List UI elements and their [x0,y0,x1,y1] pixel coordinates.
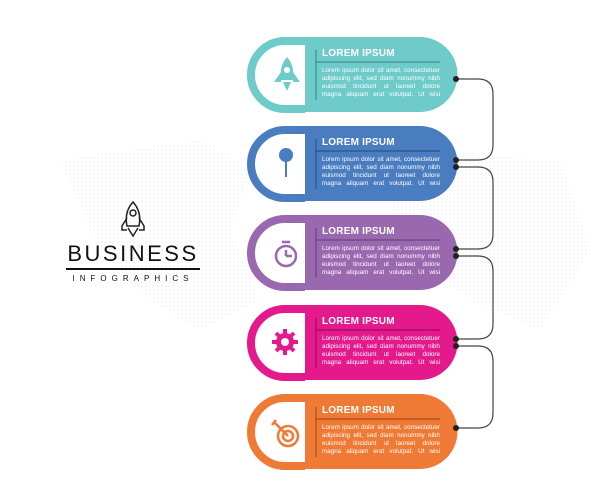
text: euismod tincidunt ut laoreet dolore [322,172,440,179]
text block 1 [322,48,440,98]
text: Lorem ipsum dolor sit amet, consectetuer [322,424,440,431]
title: BUSINESS [67,241,199,266]
icon: pin [279,148,293,177]
text: magna aliquam erat volutpat. Ut wisi [322,448,440,455]
text: magna aliquam erat volutpat. Ut wisi [322,359,440,366]
text: euismod tincidunt ut laoreet dolore [322,351,440,358]
logo rocket icon [121,201,145,238]
text: adipiscing elit, sed diam nonummy nibh [322,253,440,260]
text: adipiscing elit, sed diam nonummy nibh [322,432,440,439]
text: adipiscing elit, sed diam nonummy nibh [322,75,440,82]
text: adipiscing elit, sed diam nonummy nibh [322,343,440,350]
title: INFOGRAPHICS [73,274,193,283]
icon: rocket [274,57,300,91]
text block 2 [322,137,440,187]
text block 3 [322,226,440,276]
icon: target [272,420,298,446]
connectors [456,79,493,428]
capsule 2 [251,126,458,201]
text: magna aliquam erat volutpat. Ut wisi [322,180,440,187]
text block 5 [322,405,440,455]
text: Lorem ipsum dolor sit amet, consectetuer [322,156,440,163]
capsule 5 [251,394,458,469]
icon: stopwatch [276,242,296,266]
text: euismod tincidunt ut laoreet dolore [322,440,440,447]
text: Lorem ipsum dolor sit amet, consectetuer [322,245,440,252]
text: euismod tincidunt ut laoreet dolore [322,83,440,90]
text: LOREM IPSUM [322,316,395,327]
title [66,241,200,283]
text: Lorem ipsum dolor sit amet, consectetuer [322,335,440,342]
text: Lorem ipsum dolor sit amet, consectetuer [322,67,440,74]
text: LOREM IPSUM [322,405,395,416]
text: magna aliquam erat volutpat. Ut wisi [322,269,440,276]
inner lines [316,50,440,457]
capsule 1 [251,37,458,112]
text: LOREM IPSUM [322,137,395,148]
text: LOREM IPSUM [322,226,395,237]
icon: gear [272,329,298,355]
text: LOREM IPSUM [322,48,395,59]
text block 4 [322,316,440,366]
text: euismod tincidunt ut laoreet dolore [322,261,440,268]
capsule 4 [251,305,458,380]
capsule 3 [251,215,458,290]
text: adipiscing elit, sed diam nonummy nibh [322,164,440,171]
text: magna aliquam erat volutpat. Ut wisi [322,91,440,98]
